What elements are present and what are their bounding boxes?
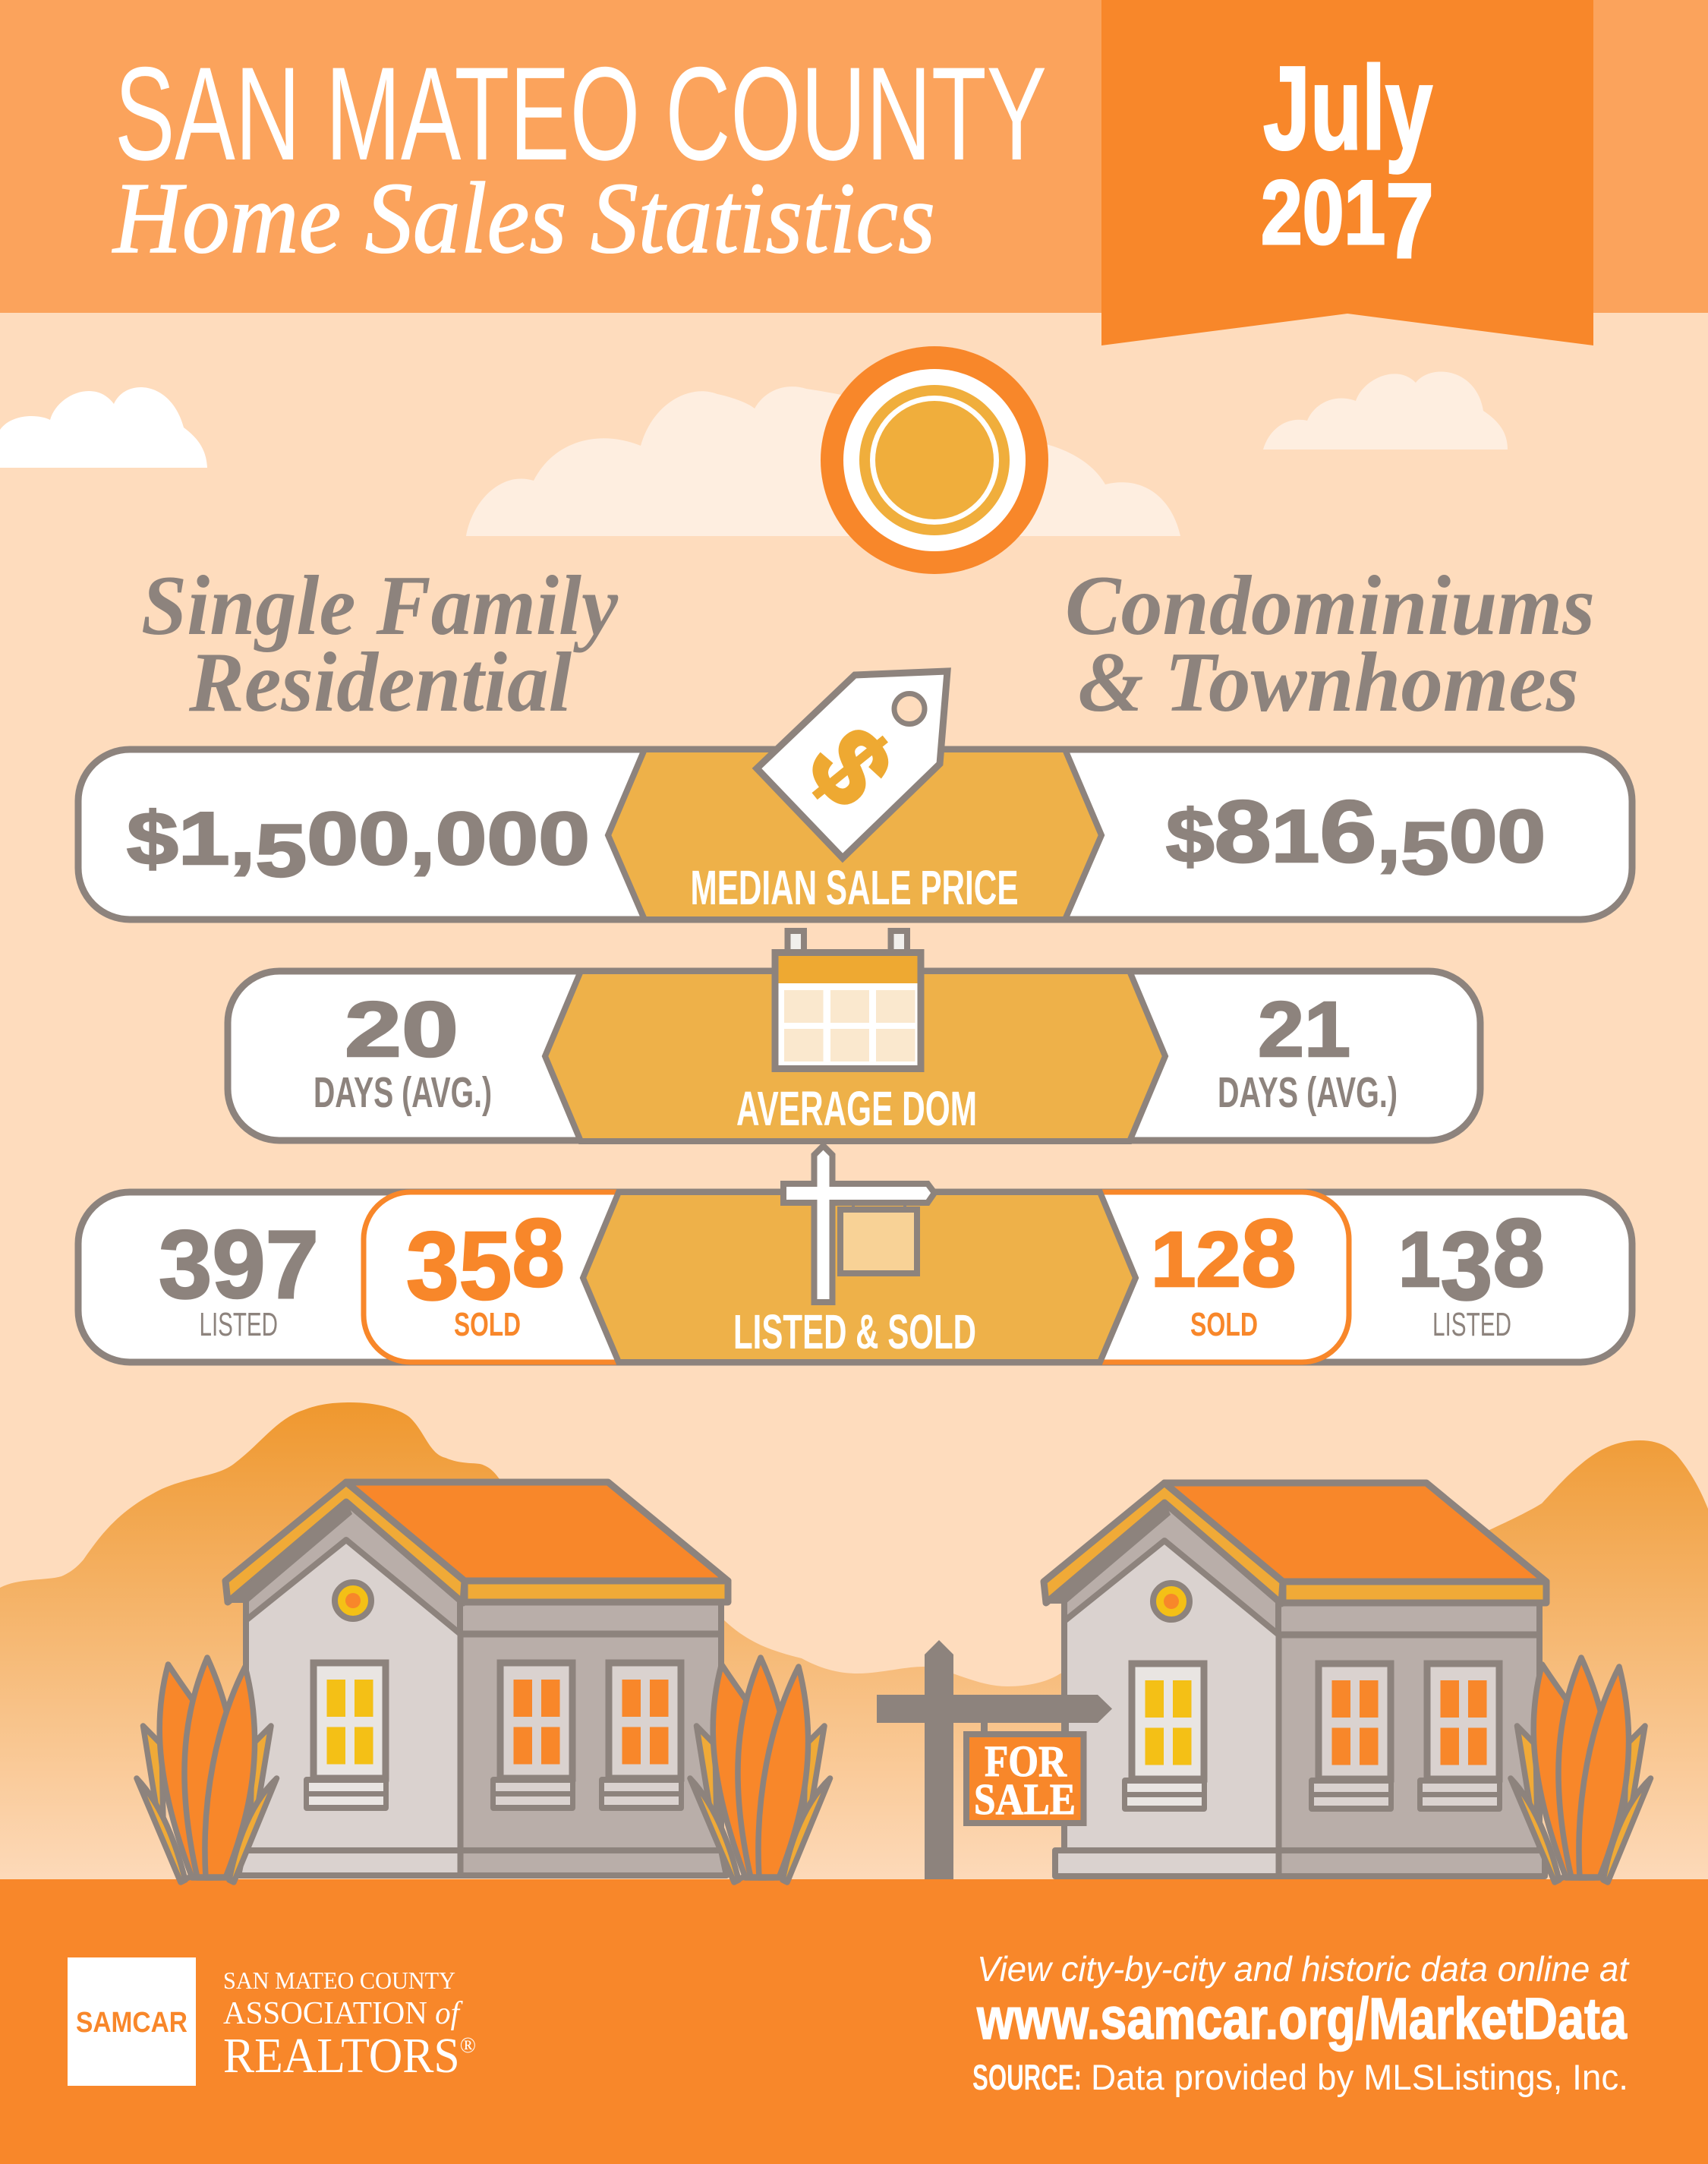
footer band xyxy=(0,1879,1708,2164)
logo: SAMCAR box: SAMCAR xyxy=(76,2007,188,2039)
logo: association name: ® xyxy=(460,2033,476,2058)
source line: SOURCE: xyxy=(972,2057,1082,2097)
icon: price tag xyxy=(757,671,947,858)
value: single family median price: $1, xyxy=(127,797,230,880)
bush: far right xyxy=(1511,1658,1650,1882)
logo: association name: ASSOCIATION of xyxy=(223,1996,463,2031)
value: condo median price: 5 xyxy=(1401,806,1449,890)
year: 201 xyxy=(1261,162,1413,263)
panel: listed and sold xyxy=(78,1146,1632,1365)
year: 7 xyxy=(1385,161,1434,280)
label: median sale price: MEDIAN SALE PRICE xyxy=(691,860,1019,915)
value: condo sold: 128 xyxy=(1151,1199,1297,1307)
hills xyxy=(0,1402,1708,1883)
value: single family median price: 5 xyxy=(255,809,307,892)
unit: condo sold: SOLD xyxy=(1190,1306,1258,1343)
logo: association name: REALTORS xyxy=(223,2028,477,2084)
heading: single family residential xyxy=(141,559,619,730)
icon: sun xyxy=(821,346,1048,574)
cloud centre xyxy=(466,386,1180,536)
value: condo DOM: 21 xyxy=(1258,986,1350,1073)
heading: condominiums and townhomes: Condominiums xyxy=(1065,559,1595,653)
title: SAN MATEO COUNTY xyxy=(115,40,1047,188)
sign text: SALE xyxy=(974,1774,1076,1824)
call to action: View city-by-city and historic data online at xyxy=(977,1949,1630,1989)
value: condo listed: 3 xyxy=(1441,1212,1492,1320)
cloud right xyxy=(1263,371,1508,450)
value: condo median price: 00 xyxy=(1449,794,1546,878)
value: single family sold: 8 xyxy=(512,1199,565,1307)
heading: single family residential: Residential xyxy=(188,636,572,730)
value: single family listed: 397 xyxy=(159,1210,319,1318)
value: condo listed: 8 xyxy=(1492,1199,1545,1307)
logo: association name: SAN MATEO COUNTY xyxy=(223,1967,455,1994)
for sale sign xyxy=(877,1640,1112,1879)
logo: association name xyxy=(223,1967,476,2084)
header band xyxy=(0,0,1708,313)
house right xyxy=(1044,1483,1546,1876)
unit: condo listed: LISTED xyxy=(1432,1306,1511,1343)
value: condo listed: 1 xyxy=(1398,1216,1441,1303)
unit: single family listed: LISTED xyxy=(199,1306,278,1343)
heading: single family residential: Single Family xyxy=(141,559,619,653)
icon: calendar xyxy=(775,931,921,1069)
icon: price tag: $ xyxy=(785,705,916,828)
bush: far left xyxy=(137,1658,276,1882)
unit: condo DOM: DAYS (AVG.) xyxy=(1218,1068,1398,1117)
month: July xyxy=(1263,43,1432,175)
panel: median sale price xyxy=(78,671,1632,920)
value: condo median price: $816, xyxy=(1166,782,1398,881)
heading: condominiums and townhomes: & Townhomes xyxy=(1078,636,1579,730)
value: single family sold: 35 xyxy=(406,1212,513,1320)
heading: condominiums and townhomes xyxy=(1065,559,1595,730)
logo: SAMCAR box xyxy=(68,1957,196,2086)
sign text: FOR xyxy=(985,1737,1067,1786)
icon: sign post xyxy=(783,1146,934,1302)
source line: Data provided by MLSListings, Inc. xyxy=(1091,2057,1628,2097)
house left xyxy=(225,1482,728,1875)
value: single family median price: 00,000 xyxy=(307,797,590,880)
sign text xyxy=(974,1737,1076,1824)
unit: single family DOM: DAYS (AVG.) xyxy=(314,1068,492,1117)
panel: average days on market xyxy=(228,931,1480,1141)
label: average DOM: AVERAGE DOM xyxy=(736,1081,977,1136)
label: listed and sold: LISTED & SOLD xyxy=(733,1304,976,1359)
unit: single family sold: SOLD xyxy=(454,1306,521,1343)
bush: middle xyxy=(690,1658,830,1882)
date ribbon xyxy=(1101,0,1593,345)
cloud left xyxy=(0,387,207,468)
value: single family DOM: 20 xyxy=(345,986,459,1073)
subtitle: Home Sales Statistics xyxy=(112,162,935,274)
